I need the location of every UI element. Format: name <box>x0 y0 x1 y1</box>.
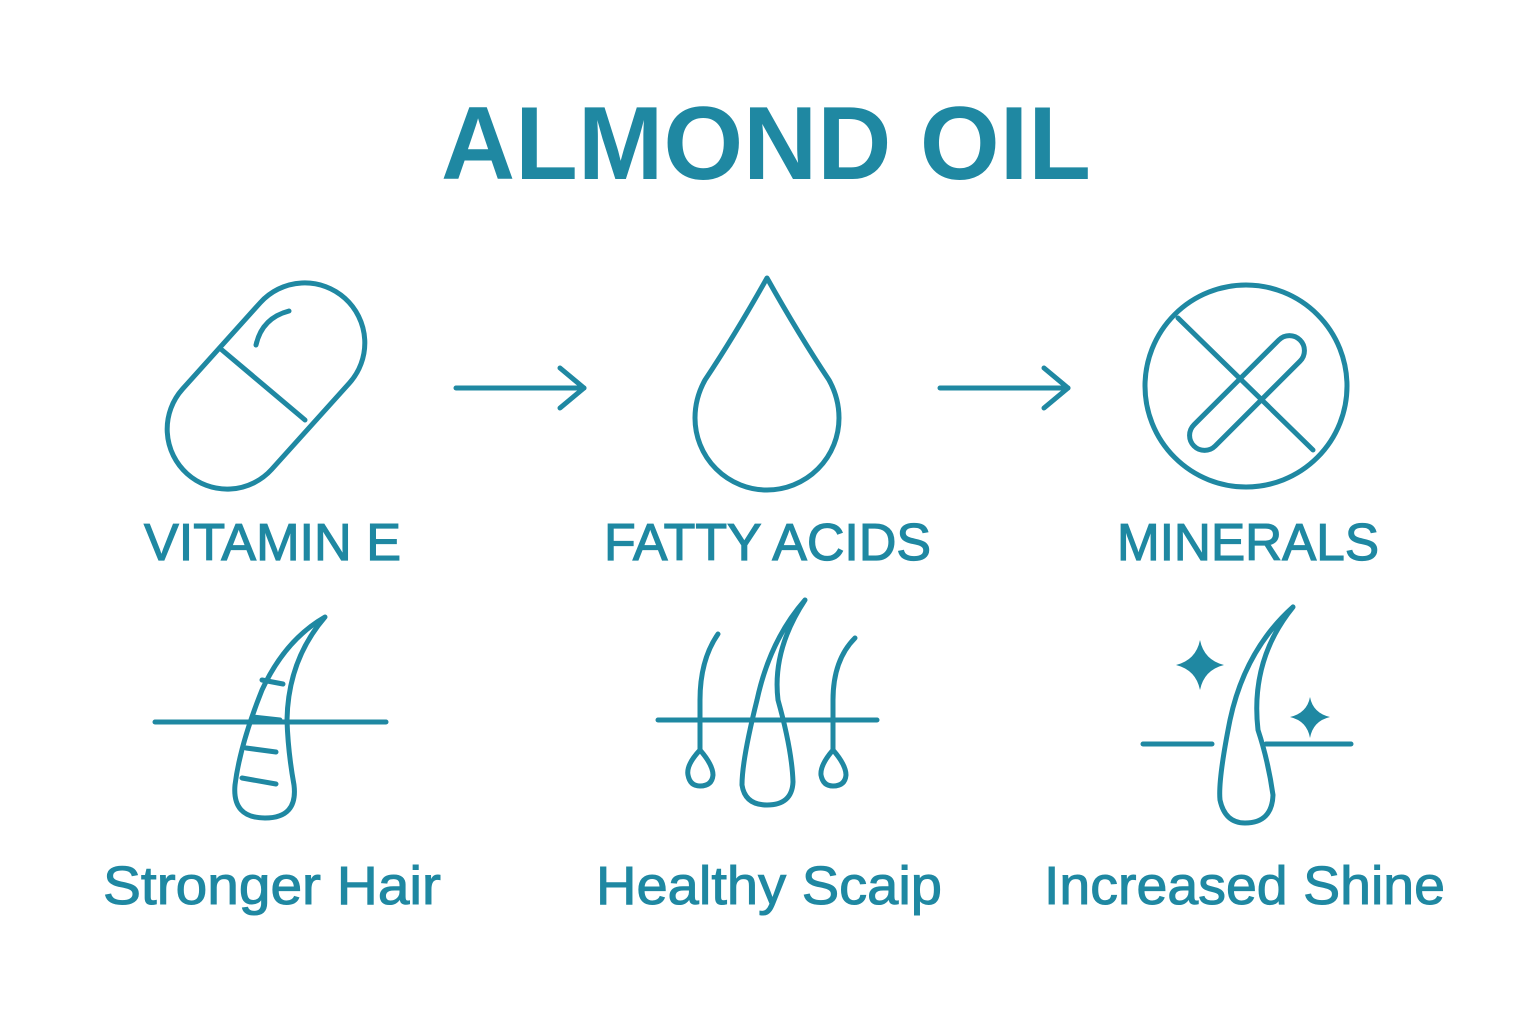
label: minerals: MINERALS <box>1117 514 1379 572</box>
icon: increased shine <box>1143 607 1351 823</box>
label: healthy scalp: Healthy Scaip <box>596 856 942 916</box>
icon: healthy scalp <box>658 600 877 805</box>
icon: minerals <box>1145 285 1347 487</box>
arrow 2 <box>940 368 1068 408</box>
title: ALMOND OIL <box>441 86 1091 202</box>
label: increased shine: Increased Shine <box>1044 856 1445 916</box>
label: vitamin e: VITAMIN E <box>144 514 401 572</box>
icon: vitamin capsule <box>142 258 390 514</box>
icon: sparkles <box>1176 640 1330 738</box>
icon: stronger hair <box>155 617 386 818</box>
label: stronger hair: Stronger Hair <box>103 856 441 916</box>
icon: oil drop <box>695 278 839 490</box>
label: fatty acids: FATTY ACIDS <box>604 514 931 572</box>
arrow 1 <box>456 368 584 408</box>
